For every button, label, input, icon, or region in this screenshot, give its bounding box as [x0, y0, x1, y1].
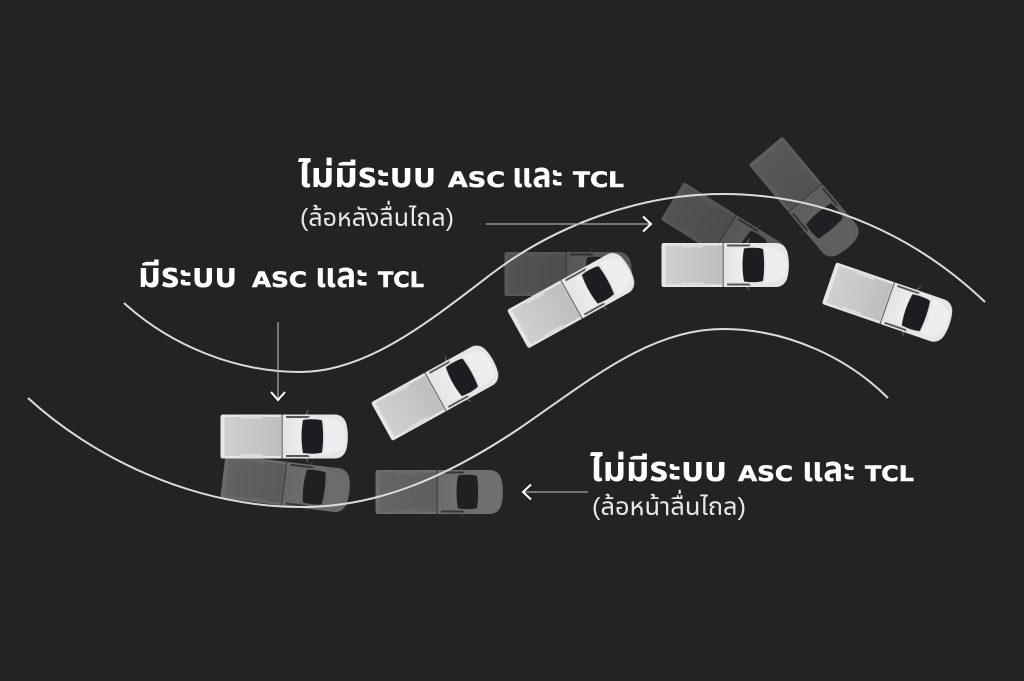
heading: without ASC and TCL, front wheel slip: ASC: [738, 462, 793, 486]
truck with ASC and TCL: position 5: [821, 257, 958, 349]
heading: without ASC and TCL, front wheel slip: TCL: [865, 462, 914, 486]
subheading: rear wheel slip: (ล้อหลังลื่นไถล): [300, 200, 454, 232]
heading: without ASC and TCL, front wheel slip: ไม่มีระบบ: [590, 450, 727, 489]
ghost truck: rear wheel slip, first: [504, 247, 632, 300]
heading: without ASC and TCL, front wheel slip: [590, 450, 914, 489]
heading: with ASC and TCL: [138, 256, 424, 295]
ghost truck: front wheel slip, reflected at start: [220, 449, 353, 517]
heading: without ASC and TCL, rear wheel slip: [298, 156, 624, 195]
heading: without ASC and TCL, rear wheel slip: และ: [512, 156, 563, 195]
road curves: [28, 194, 985, 507]
arrow: right to rear-slip trucks: [486, 216, 651, 232]
ghost truck: front wheel slip, understeer: [376, 465, 503, 518]
heading: with ASC and TCL: มีระบบ: [138, 256, 237, 295]
arrow: left to front-slip truck: [523, 484, 588, 500]
heading: with ASC and TCL: ASC: [252, 268, 307, 292]
ghost truck: rear wheel slip, third: [746, 133, 868, 265]
heading: without ASC and TCL, rear wheel slip: ASC: [448, 168, 505, 192]
heading: without ASC and TCL, rear wheel slip: TCL: [573, 168, 624, 192]
heading: with ASC and TCL: TCL: [378, 268, 424, 292]
subheading: front wheel slip: (ล้อหน้าลื่นไถล): [592, 489, 746, 521]
ghost truck: rear wheel slip, second: [659, 178, 795, 290]
heading: with ASC and TCL: และ: [315, 256, 368, 295]
truck with ASC and TCL: position 2: [368, 336, 506, 445]
heading: without ASC and TCL, front wheel slip: และ: [802, 450, 855, 489]
arrow: down to truck: [271, 322, 285, 400]
truck with ASC and TCL: position 4: [662, 238, 789, 291]
truck with ASC and TCL: position 3: [504, 244, 642, 352]
heading: without ASC and TCL, rear wheel slip: ไม่มีระบบ: [298, 156, 436, 195]
truck with ASC and TCL: position 1: [220, 410, 348, 462]
